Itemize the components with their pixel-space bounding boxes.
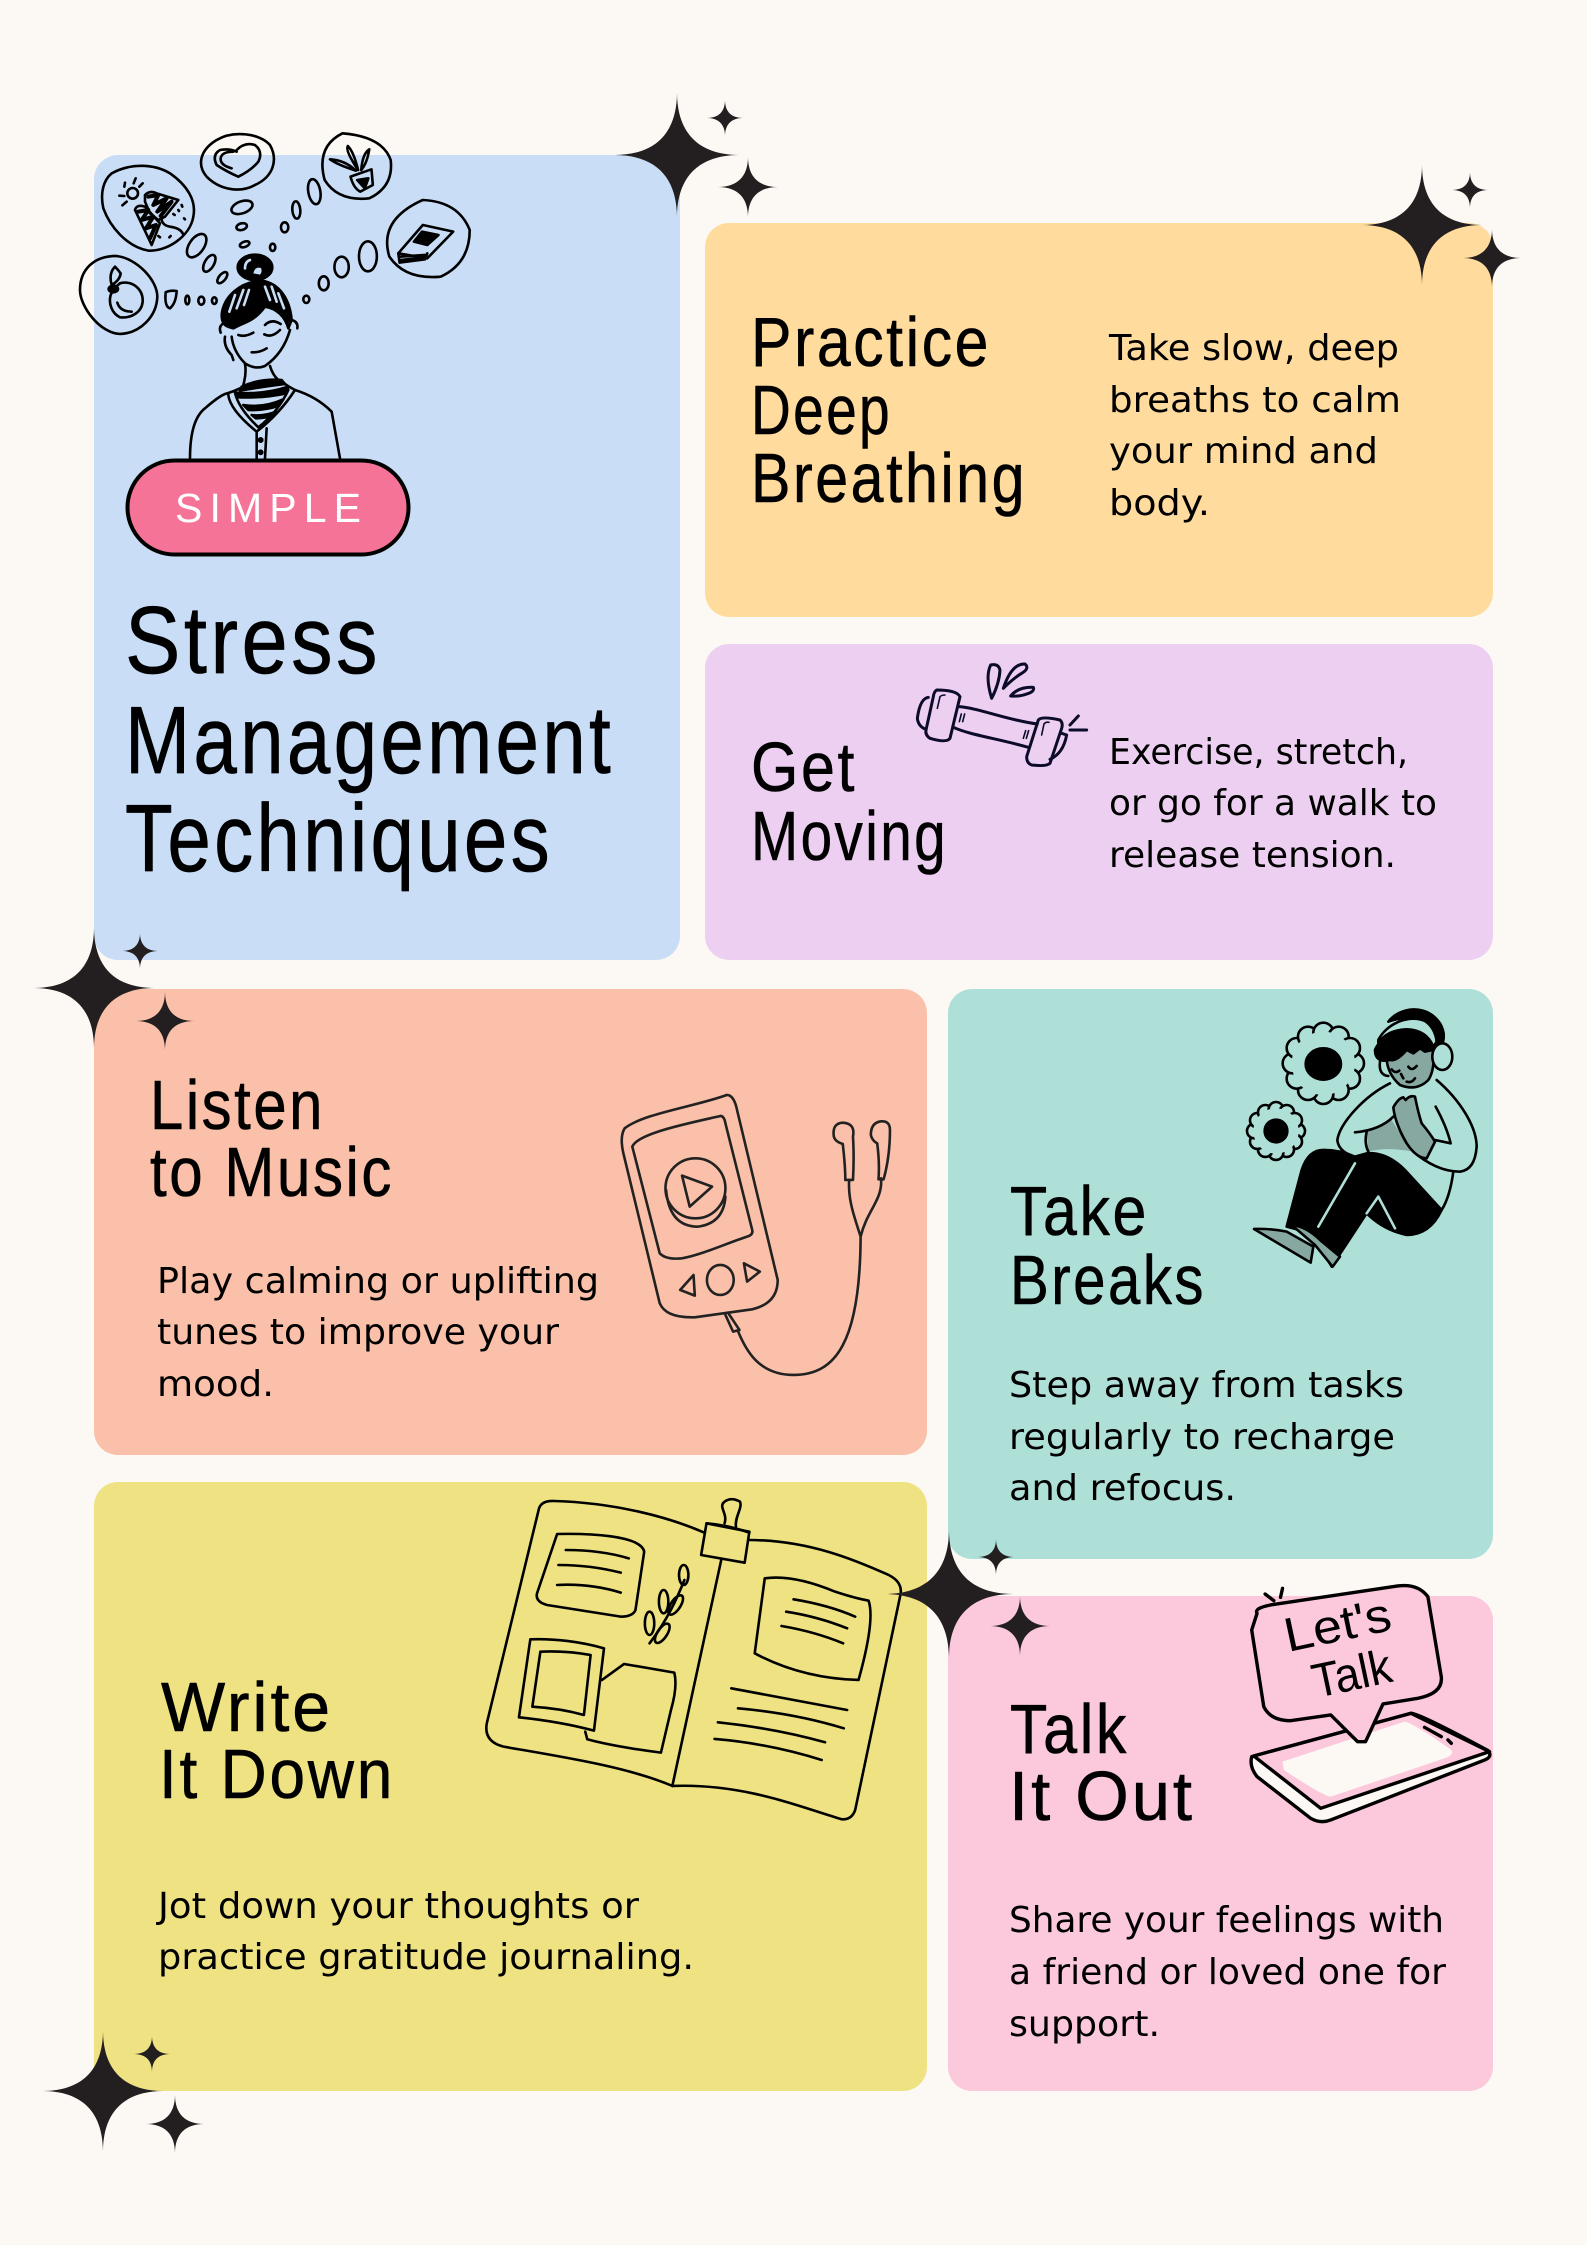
panel: talk it out [948, 1586, 1493, 2091]
body text: breaths to calm [1109, 380, 1401, 421]
panel: practice deep breathing [705, 223, 1493, 617]
body text [1009, 1900, 1446, 2045]
body text: Step away from tasks [1009, 1365, 1404, 1406]
icon: phone with speech bubble: Talk [1307, 1640, 1397, 1709]
body text: Exercise, stretch, [1109, 732, 1408, 773]
body text [1109, 732, 1437, 876]
icon: music player with earphones [622, 1095, 890, 1375]
body text: body. [1109, 483, 1210, 524]
panel: take breaks [948, 989, 1493, 1559]
icon: dumbbell [917, 664, 1087, 766]
heading [1010, 1172, 1206, 1319]
body text [1009, 1365, 1404, 1509]
sparkle cluster: bottom left [43, 2031, 204, 2153]
title text: Management [125, 687, 614, 794]
heading: to Music [150, 1133, 394, 1211]
heading [751, 728, 948, 875]
heading: Take [1010, 1172, 1149, 1250]
panel: listen to music [94, 989, 927, 1455]
heading: Practice [751, 303, 991, 381]
sparkle cluster: left middle [34, 928, 194, 1050]
title text: Stress [125, 587, 381, 694]
body text: Share your feelings with [1009, 1900, 1444, 1941]
heading: Listen [150, 1066, 325, 1144]
body text: tunes to improve your [157, 1312, 559, 1353]
body text: support. [1009, 2004, 1160, 2045]
heading: Deep [751, 371, 892, 449]
sparkle cluster: top right [1362, 165, 1521, 287]
icon: phone with speech bubble [1251, 1586, 1490, 1822]
heading: Moving [751, 797, 948, 875]
panel: get moving [705, 644, 1493, 960]
title text: Techniques [125, 785, 553, 892]
heading: Breathing [751, 439, 1027, 517]
heading [1009, 1690, 1195, 1835]
body text: or go for a walk to [1109, 783, 1437, 824]
heading: Breaks [1010, 1241, 1206, 1319]
panel: title [80, 133, 680, 960]
heading: Get [751, 728, 857, 806]
body text: Jot down your thoughts or [156, 1886, 639, 1927]
body text: a friend or loved one for [1009, 1952, 1446, 1993]
body text: regularly to recharge [1009, 1417, 1395, 1458]
heading [150, 1066, 394, 1211]
body text: and refocus. [1009, 1468, 1236, 1509]
sparkle cluster: centre right [885, 1530, 1050, 1658]
body text: practice gratitude journaling. [158, 1937, 694, 1978]
body text: Play calming or uplifting [157, 1261, 599, 1302]
icon: open journal with clip [486, 1499, 901, 1819]
heading [159, 1668, 395, 1813]
panel: write it down [94, 1482, 927, 2091]
body text [1108, 328, 1401, 524]
body text [157, 1261, 599, 1405]
heading: Write [161, 1668, 333, 1746]
body text [156, 1886, 694, 1978]
heading: It Out [1009, 1757, 1195, 1835]
badge: SIMPLE pill: SIMPLE [175, 485, 361, 531]
icon: meditating woman with thought bubbles [80, 133, 470, 458]
sparkle cluster: top of title panel [615, 93, 778, 217]
title text [125, 587, 614, 892]
badge: SIMPLE pill [128, 460, 408, 554]
body text: mood. [157, 1364, 274, 1405]
body text: your mind and [1109, 431, 1378, 472]
icon: phone with speech bubble: Let's [1279, 1588, 1396, 1663]
heading: Talk [1010, 1690, 1129, 1768]
heading: It Down [159, 1735, 395, 1813]
body text: Take slow, deep [1108, 328, 1399, 369]
body text: release tension. [1109, 835, 1396, 876]
icon: person meditating with flowers [1247, 1009, 1477, 1267]
heading [751, 303, 1027, 517]
